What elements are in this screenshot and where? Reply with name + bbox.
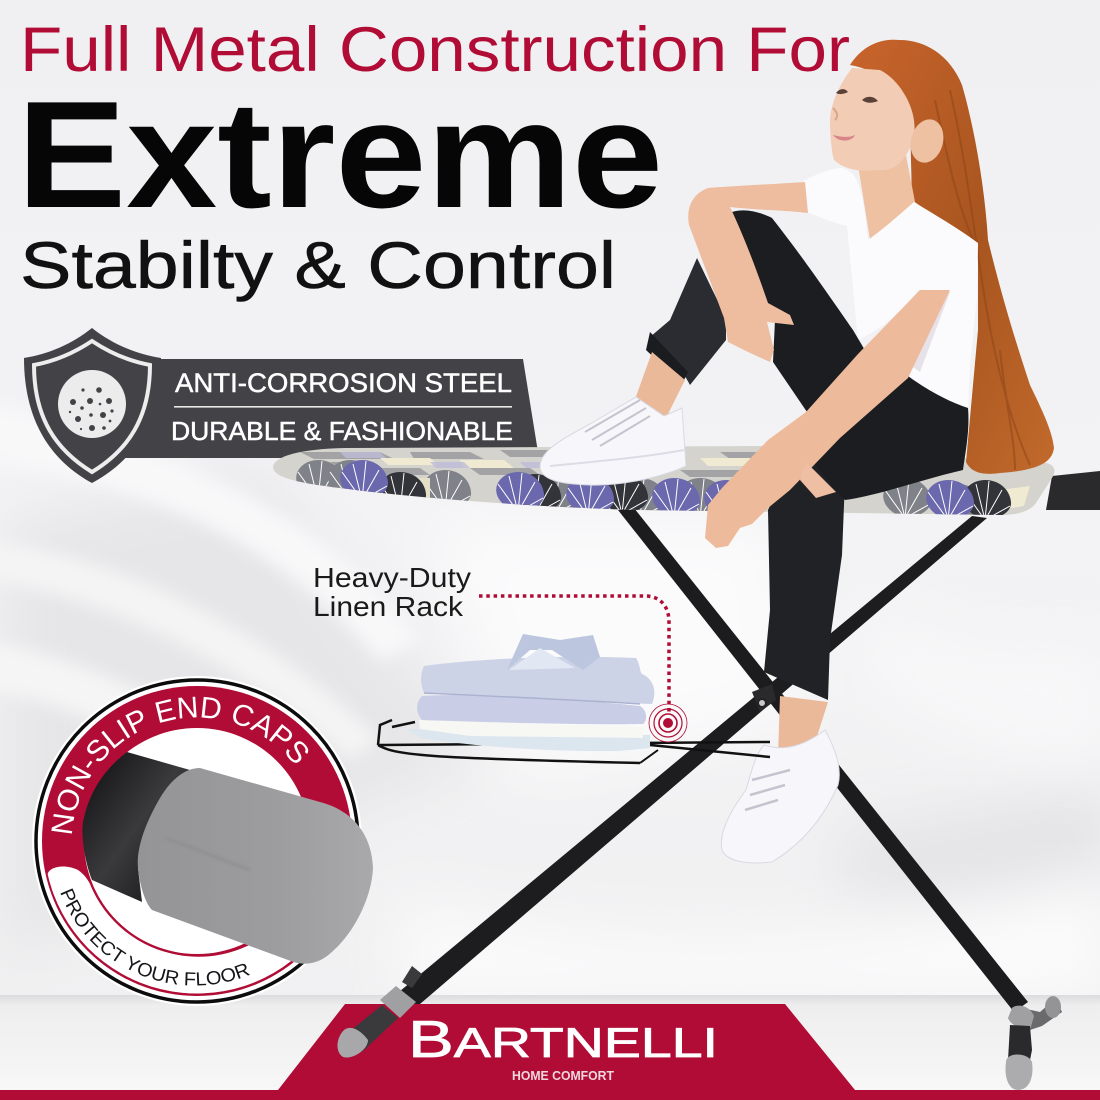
title: stability and control: Stabilty & Control: [20, 228, 616, 302]
black tube: [82, 752, 190, 902]
badge headline: NON-SLIP END CAPS: [51, 696, 308, 834]
logo ribbon: [0, 1004, 1100, 1100]
badge: non-slip end caps: [32, 676, 373, 1006]
torn jeans: [800, 462, 836, 498]
lower white band: [48, 867, 314, 994]
left shoe: [540, 397, 686, 485]
label: heavy-duty linen rack: Heavy-Duty: [313, 562, 471, 593]
stack: bottom shirt: [407, 729, 650, 751]
title: extreme: Extreme: [17, 70, 663, 240]
banner text line two: DURABLE & FASHIONABLE: [171, 416, 513, 446]
label: heavy-duty linen rack: Linen Rack: [313, 591, 463, 622]
icon: target marker: [649, 704, 687, 742]
stack: second shirt: [417, 695, 646, 724]
right arm and hand: [705, 290, 950, 548]
linen rack with shirts: [378, 634, 770, 763]
collar: [507, 634, 600, 670]
banner: anti-corrosion steel: [120, 359, 540, 458]
title: full metal construction: Full Metal Construction For: [20, 15, 850, 85]
grey end cap: [138, 768, 373, 964]
hair: [850, 40, 1054, 474]
skin: ankle: [634, 352, 685, 420]
label: heavy-duty linen rack: [313, 562, 471, 622]
banner text line one: ANTI-CORROSION STEEL: [175, 368, 512, 398]
badge subline: PROTECT YOUR FLOOR: [60, 888, 250, 986]
board legs: [358, 508, 1028, 1040]
front left foot over ribbon: [337, 966, 422, 1058]
icon: iron rest: [1046, 471, 1100, 510]
ankle right leg: [778, 696, 828, 756]
icon: shield: [24, 328, 161, 483]
neck: [858, 150, 915, 240]
jeans: upper leg: [732, 210, 968, 500]
right shoe: [721, 730, 839, 863]
stack: top shirt: [421, 657, 654, 704]
face: [830, 68, 915, 171]
jeans: lower left leg: [648, 258, 726, 385]
ironing board: [273, 446, 1054, 515]
tagline: HOME COMFORT: [512, 1069, 614, 1083]
ear: [906, 116, 948, 166]
brand name: B ARTNELLI: [408, 1011, 718, 1069]
white t-shirt: [803, 168, 978, 412]
left arm: [688, 182, 808, 362]
stack: white shirt: [419, 720, 643, 738]
child figure: [540, 40, 1054, 863]
callout: dotted leader: [479, 596, 669, 712]
jeans: lower leg: [764, 455, 845, 700]
right foot: [1006, 996, 1062, 1090]
